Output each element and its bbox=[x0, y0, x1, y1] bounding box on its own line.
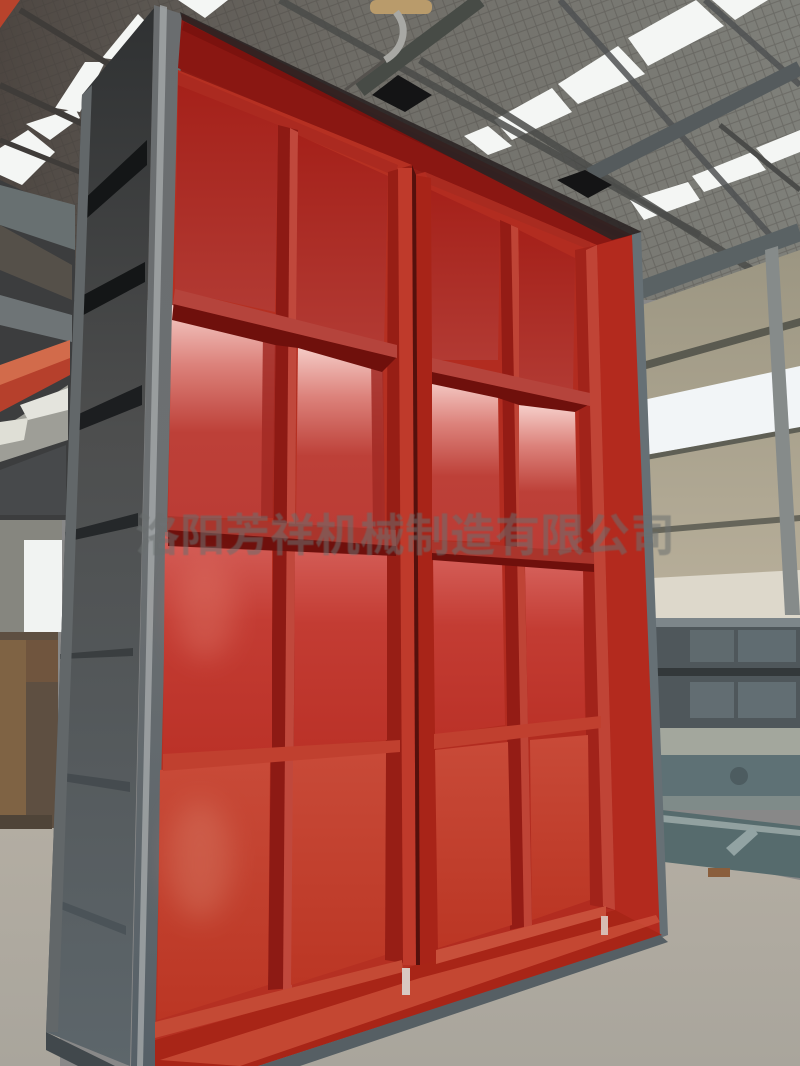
gate front flange bbox=[131, 5, 182, 1066]
background: right floor bbox=[258, 850, 800, 1066]
gate red body bbox=[155, 14, 662, 1066]
background: factory wall bbox=[0, 246, 800, 632]
top edge plate bbox=[180, 12, 642, 240]
left door bbox=[155, 70, 416, 1040]
door seam bbox=[412, 165, 420, 965]
left door panels bbox=[157, 85, 388, 1020]
left door cross bars bbox=[155, 289, 403, 1038]
door pins bbox=[402, 916, 608, 995]
background: factory ceiling bbox=[0, 0, 800, 520]
panel highlights bbox=[168, 560, 235, 920]
left door vertical stiffener bbox=[268, 125, 298, 990]
left door frame bbox=[155, 70, 416, 1040]
right door panels bbox=[431, 190, 590, 948]
right door cross bars bbox=[432, 358, 606, 964]
right door bbox=[414, 172, 615, 965]
ceiling beams bbox=[0, 0, 800, 300]
right door right post bbox=[575, 245, 615, 910]
right door frame bbox=[414, 172, 615, 965]
left door right post bbox=[385, 165, 416, 965]
ceiling skylights bbox=[0, 0, 800, 220]
right door cross bar shadows bbox=[432, 368, 594, 572]
right door vertical stiffener bbox=[500, 220, 532, 930]
steel gate bbox=[46, 5, 668, 1066]
hoist hook and lifting lugs bbox=[345, 0, 612, 198]
gate left side ribs bbox=[46, 8, 154, 1066]
watermark: 洛阳芳祥机械制造有限公司 bbox=[135, 510, 675, 561]
bottom red tray bbox=[155, 910, 662, 1066]
left door panel side strips bbox=[261, 328, 385, 530]
top red band bbox=[178, 14, 632, 248]
background: floor bbox=[0, 828, 60, 1066]
background: stacked steel gates at right bbox=[654, 618, 800, 878]
right red wall bbox=[597, 235, 662, 935]
left door cross bar shadows bbox=[168, 300, 396, 556]
bottom grey plate bbox=[258, 935, 668, 1066]
background: left stacked materials bbox=[0, 632, 58, 829]
